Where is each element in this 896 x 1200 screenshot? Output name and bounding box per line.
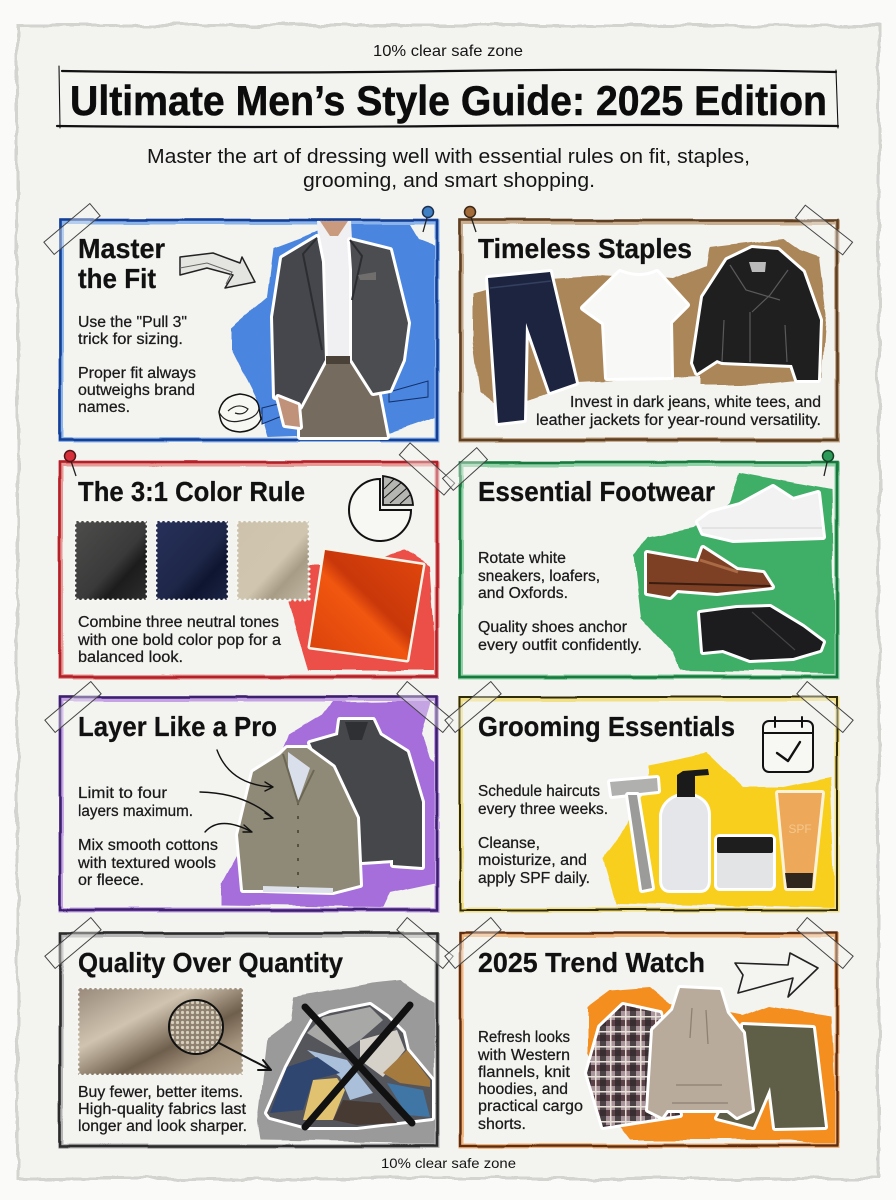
illustration: flannel shirt	[587, 1005, 680, 1127]
body text: with Western	[477, 1047, 570, 1064]
body text: Combine three neutral tones	[78, 614, 279, 631]
heading: The 3:1 Color Rule	[78, 476, 305, 507]
heading: the Fit	[78, 263, 156, 294]
subtitle: grooming, and smart shopping.	[303, 170, 595, 192]
fabric swatch: charcoal	[75, 521, 147, 600]
fabric swatch: navy	[156, 521, 228, 600]
body text: Cleanse,	[478, 835, 540, 852]
subtitle: Master the art of dressing well with essential rules on fit, staples,	[147, 146, 750, 168]
body text: hoodies, and	[478, 1081, 568, 1098]
icon: calendar	[763, 717, 813, 772]
body text: apply SPF daily.	[478, 870, 590, 887]
illustration: pump bottle	[662, 769, 709, 890]
body text: Refresh looks	[478, 1029, 570, 1046]
body text: with one bold color pop for a	[77, 632, 281, 649]
icon: measuring tape	[219, 381, 428, 432]
panel: grooming essentials	[445, 682, 853, 910]
illustration: orange pocket square	[310, 550, 423, 660]
illustration: white t-shirt	[583, 272, 687, 378]
body text: Proper fit always	[78, 365, 196, 382]
body text: layers maximum.	[78, 803, 193, 820]
illustration: leather jacket	[693, 248, 820, 380]
body text: or fleece.	[78, 872, 144, 889]
tape	[397, 682, 453, 732]
heading	[78, 233, 165, 294]
panel border	[460, 220, 837, 440]
panel border	[460, 933, 837, 1146]
illustration: cream jar	[717, 837, 773, 888]
heading: Timeless Staples	[478, 233, 692, 264]
body text: with textured wools	[77, 855, 216, 872]
illustration: fabric swatch	[78, 988, 243, 1075]
panel: 2025 trend watch	[445, 918, 853, 1146]
illustration: SPF tube: SPF	[788, 822, 812, 836]
heading: Essential Footwear	[478, 476, 715, 507]
heading: Quality Over Quantity	[78, 947, 344, 978]
heading: Grooming Essentials	[478, 711, 735, 742]
body text: Quality shoes anchor	[478, 619, 627, 636]
body text: flannels, knit	[478, 1064, 571, 1081]
arrows to layers	[200, 750, 273, 832]
illustration: black oxfords	[700, 607, 823, 660]
blue colour blob	[232, 222, 436, 437]
body text: leather jackets for year-round versatility.	[536, 412, 821, 429]
body text: shorts.	[478, 1116, 526, 1133]
panel border	[60, 697, 437, 910]
illustration: cargo shorts	[717, 1025, 825, 1128]
illustration: white sneaker	[698, 487, 823, 540]
illustration: safety razor	[610, 778, 658, 890]
brown colour blob	[473, 238, 827, 403]
pin	[464, 206, 476, 232]
panel border	[60, 933, 437, 1146]
illustration: dark jeans	[488, 272, 576, 423]
safe zone note: bottom: 10% clear safe zone	[381, 1155, 516, 1171]
tape	[795, 205, 853, 255]
heading: 2025 Trend Watch	[478, 947, 705, 978]
panel: quality over quantity	[45, 918, 453, 1146]
illustration: brown loafer	[647, 548, 772, 597]
tape	[797, 918, 853, 968]
panel border	[60, 462, 437, 677]
tape	[45, 682, 101, 732]
body text	[78, 314, 196, 416]
pin	[64, 450, 76, 476]
illustration: knit hoodie	[648, 988, 752, 1117]
body text: Use the "Pull 3"	[78, 314, 187, 331]
body text	[77, 614, 281, 666]
tape	[445, 682, 501, 732]
illustration: SPF tube	[778, 793, 822, 888]
panel: 3:1 colour rule	[60, 443, 455, 677]
body text: trick for sizing.	[78, 331, 183, 348]
body text: every three weeks.	[478, 801, 608, 818]
body text: moisturize, and	[478, 852, 587, 869]
body text: names.	[78, 399, 130, 416]
panel: layer like a pro	[45, 682, 453, 910]
body text: sneakers, loafers,	[478, 568, 600, 585]
body text: and Oxfords.	[478, 585, 568, 602]
tape	[445, 918, 501, 968]
icon: pie chart	[349, 476, 413, 541]
body text	[478, 783, 608, 887]
subtitle	[147, 146, 750, 192]
fabric swatch: beige	[237, 521, 309, 600]
body text: longer and look sharper.	[78, 1118, 247, 1135]
body text: Mix smooth cottons	[78, 837, 218, 854]
body text: balanced look.	[78, 649, 183, 666]
icon: sketched arrow	[735, 953, 818, 997]
panel border	[460, 697, 837, 910]
yellow colour blob	[602, 753, 836, 908]
tape	[443, 448, 487, 490]
body text: practical cargo	[478, 1098, 583, 1115]
body text: every outfit confidently.	[478, 637, 642, 654]
illustration: pile of clothes	[267, 1005, 432, 1127]
tape	[44, 204, 100, 254]
panel: essential footwear	[443, 448, 837, 677]
panel: master the fit	[44, 204, 437, 440]
illustration: man in blazer	[273, 221, 408, 437]
panel: timeless staples	[460, 205, 853, 440]
green colour blob	[633, 473, 836, 672]
icon: magnifier with arrow	[169, 1000, 271, 1070]
pin	[822, 450, 834, 476]
heading: Master	[78, 233, 165, 264]
illustration: dark fleece jacket	[310, 720, 422, 867]
red colour blob	[288, 550, 437, 670]
body text	[478, 550, 642, 654]
body text: Schedule haircuts	[478, 783, 600, 800]
pin	[422, 206, 434, 232]
safe zone note: top: 10% clear safe zone	[373, 43, 523, 60]
body text: Rotate white	[478, 550, 566, 567]
orange colour blob	[587, 987, 836, 1145]
body text: outweighs brand	[78, 382, 195, 399]
body text	[477, 1029, 583, 1133]
body text	[77, 785, 218, 889]
tape	[797, 682, 853, 732]
icon: sketched arrow	[180, 253, 255, 288]
body text: High-quality fabrics last	[78, 1101, 247, 1118]
body text: Buy fewer, better items.	[78, 1084, 243, 1101]
tape	[397, 918, 453, 968]
icon: cross-out X	[305, 1005, 412, 1127]
purple colour blob	[222, 700, 437, 907]
body text	[536, 394, 821, 429]
grey colour blob	[257, 980, 436, 1143]
tape	[399, 443, 455, 495]
body text	[78, 1084, 247, 1135]
title: Ultimate Men’s Style Guide: 2025 Edition	[70, 77, 827, 124]
tape	[45, 918, 101, 968]
heading: Layer Like a Pro	[78, 711, 277, 742]
body text: Limit to four	[78, 785, 167, 802]
panel border	[60, 220, 437, 440]
illustration: olive cardigan	[238, 748, 360, 893]
panel border	[460, 462, 837, 677]
body text: Invest in dark jeans, white tees, and	[570, 394, 821, 411]
